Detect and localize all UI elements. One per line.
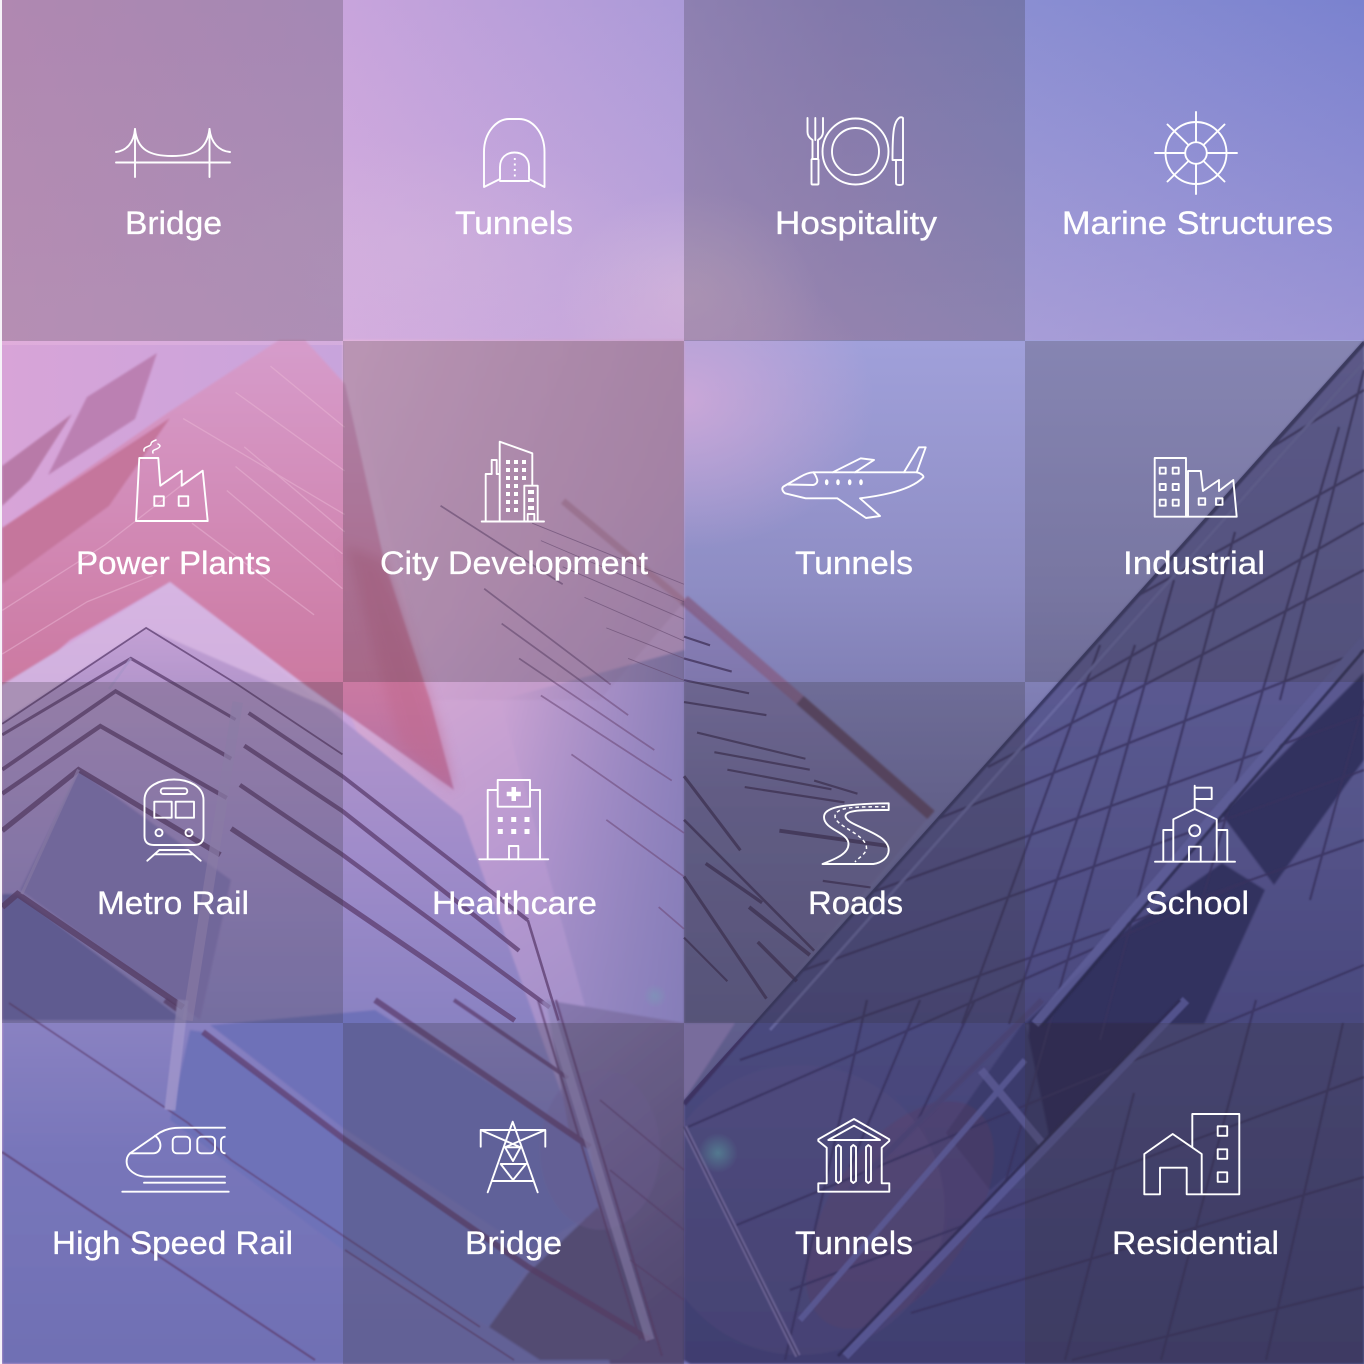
- icon: transmission tower: [481, 1122, 545, 1192]
- icon: metro train: [144, 780, 204, 861]
- label: Marine Structures: Marine Structures: [1062, 205, 1333, 241]
- tile: Metro Rail: [2, 682, 343, 1023]
- label: Hospitality: Hospitality: [775, 205, 937, 241]
- label: Bridge: Bridge: [465, 1225, 562, 1261]
- right building: [640, 340, 1364, 1364]
- dark window bands on front building: [2, 628, 558, 1020]
- tile: Bridge: [2, 0, 343, 341]
- tile: Industrial: [1025, 341, 1364, 682]
- label: Tunnels: Tunnels: [455, 205, 573, 241]
- tile: Healthcare: [343, 682, 684, 1023]
- right building mullions: [684, 342, 1364, 1360]
- label: Healthcare: Healthcare: [432, 885, 597, 921]
- soft pink light band: [345, 545, 454, 790]
- icon: tunnel: [484, 119, 544, 187]
- label: School: School: [1145, 885, 1249, 921]
- icon: high speed train: [122, 1128, 239, 1192]
- front-left building: [2, 582, 690, 1364]
- label: Bridge: Bridge: [125, 205, 222, 241]
- pale louvres on pink tower: [2, 366, 345, 654]
- tile: Bridge (pylon): [343, 1023, 684, 1364]
- tile: Residential: [1025, 1023, 1364, 1364]
- bluish glass panels: [170, 1030, 528, 1327]
- tile: School: [1025, 682, 1364, 1023]
- label: Power Plants: Power Plants: [76, 545, 271, 581]
- icon: columned building: [818, 1119, 889, 1192]
- label: City Development: City Development: [380, 545, 648, 581]
- label: Tunnels: Tunnels: [795, 1225, 913, 1261]
- label: Metro Rail: Metro Rail: [97, 885, 249, 921]
- label: Roads: Roads: [808, 885, 903, 921]
- label: High Speed Rail: High Speed Rail: [52, 1225, 293, 1261]
- icon: factory: [136, 440, 208, 521]
- icon: city buildings: [482, 442, 544, 522]
- icon: industrial buildings: [1155, 458, 1237, 517]
- central haze and building: [343, 340, 931, 1360]
- icon: airplane: [782, 447, 926, 518]
- label: Tunnels: Tunnels: [795, 545, 913, 581]
- icon: school: [1155, 786, 1235, 862]
- right tower edge band: [563, 501, 684, 602]
- tile: Roads: [684, 682, 1025, 1023]
- icon: house and apartment block: [1144, 1114, 1239, 1194]
- tile: Power Plants: [2, 341, 343, 682]
- tile: Tunnels: [343, 0, 684, 341]
- tile: Tunnels (columns): [684, 1023, 1025, 1364]
- icon: suspension bridge: [116, 129, 230, 177]
- icon: winding road: [822, 803, 889, 864]
- tile: City Development: [343, 341, 684, 682]
- tile: High Speed Rail: [54, 1126, 291, 1261]
- label: Residential: Residential: [1112, 1225, 1279, 1261]
- left white edge: [0, 0, 2, 1364]
- label: Industrial: Industrial: [1123, 545, 1265, 581]
- central building louvres: [441, 506, 684, 929]
- tile: Tunnels (airplane): [684, 341, 1025, 682]
- tile: Hospitality: [684, 0, 1025, 341]
- icon: plate and cutlery: [808, 117, 903, 185]
- icon: hospital: [479, 780, 548, 859]
- tile: Marine Structures: [1025, 0, 1364, 341]
- icon: ship wheel: [1155, 112, 1237, 194]
- pink tower: [2, 340, 454, 790]
